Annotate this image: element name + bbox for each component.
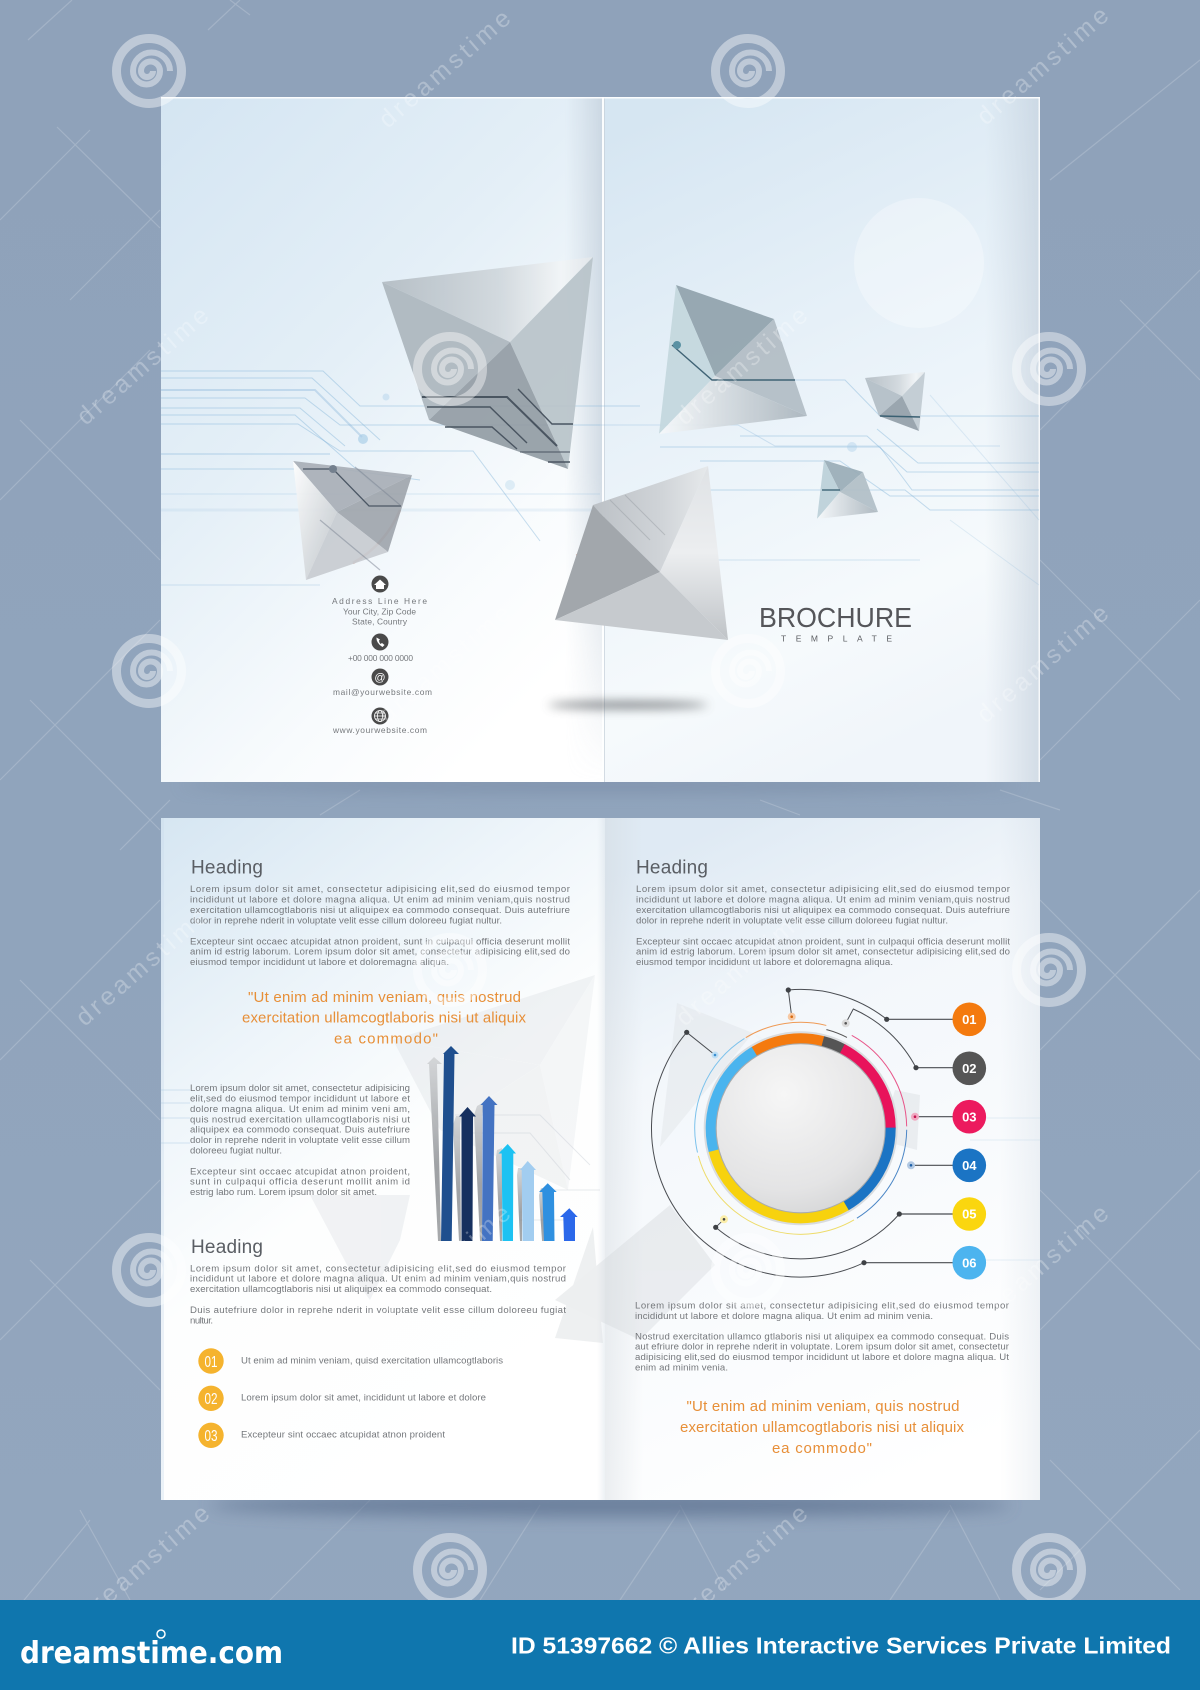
text block: left lower: [190, 1263, 567, 1326]
lens arc: [353, 510, 593, 617]
list item 02: [198, 1386, 486, 1411]
arrow 7: [560, 1208, 578, 1241]
text block: left column: [190, 1083, 410, 1198]
text block: left intro: dolor in reprehe nderit in voluptate velit esse cillum doloreeu fugiat nultur.: [190, 915, 502, 926]
text block: left intro: [190, 884, 571, 968]
text block: left column: Excepteur sint occaec atcupidat atnon proident,: [190, 1166, 410, 1177]
text block: left column: dolor in reprehe nderit in voluptate velit esse cillum: [190, 1135, 410, 1146]
list item 02: Lorem ipsum dolor sit amet, incididunt ut labore et dolore: [241, 1393, 486, 1404]
badge 06: 06: [962, 1255, 977, 1270]
pyramid: small lower right: [817, 460, 878, 519]
text block: left intro: Excepteur sint occaec atcupidat atnon proident, sunt in culpaqui officia deserunt mollit: [190, 936, 570, 947]
right cover page: [602, 97, 1040, 782]
text block: right intro: [636, 884, 1011, 968]
watermark text: dreamstime: [971, 1199, 1114, 1329]
badge 05: [952, 1197, 986, 1231]
callout: right quote: exercitation ullamcogtlaboris nisi ut aliquix: [680, 1419, 964, 1436]
title: BROCHURE TEMPLATE: TEMPLATE: [781, 634, 892, 644]
connector dots: [684, 987, 919, 1265]
text block: left intro: eiusmod tempor incididunt ut labore et doloremagna aliqua.: [190, 957, 449, 968]
right inside page: [605, 818, 1040, 1500]
badge 04: 04: [962, 1158, 977, 1173]
badge 05: 05: [962, 1207, 977, 1222]
contact: email: mail@yourwebsite.com: [333, 687, 432, 697]
watermark text: dreamstime: [373, 1199, 516, 1329]
arrow 3: [480, 1096, 498, 1241]
thin outer arcs: [655, 983, 946, 1274]
text block: right lower: Nostrud exercitation ullamco gtlaboris nisi ut aliquipex ea commodo consequat. Duis: [635, 1331, 1009, 1342]
watermark text: dreamstime: [670, 301, 813, 431]
text block: right intro: dolor in reprehe nderit in voluptate velit esse cillum doloreeu fugiat nultur.: [636, 915, 948, 926]
text block: left column: estrig labo rum. Lorem ipsum dolor sit amet.: [190, 1187, 377, 1198]
text block: right lower: adipisicing elit,sed do eiusmod tempor incididunt ut labore et dolore magna aliqua. Ut: [635, 1352, 1009, 1363]
callout: right quote: ea commodo": [772, 1440, 872, 1457]
arrow 1: [441, 1046, 459, 1241]
text block: right lower: enim ad minim venia.: [635, 1362, 728, 1373]
arrow 2: [459, 1107, 476, 1241]
panel: bottom brochure spread (inside): [161, 818, 1040, 1500]
contact: email: [333, 668, 432, 697]
text block: left column: quis nostrud exercitation ullamcogtlaboris nisi ut: [190, 1114, 410, 1125]
text block: right intro: Excepteur sint occaec atcupidat atnon proident, sunt in culpaqui officia deserunt mollit: [636, 936, 1010, 947]
text block: right intro: incididunt ut labore et dolore magna aliqua. Ut enim ad minim veniam,quis nostrud: [636, 894, 1010, 906]
text block: left intro: anim id estrig laborum. Lorem ipsum dolor sit amet, consectetur adipisicing elit,sed do: [190, 947, 570, 958]
heading: left page 2: Heading: [191, 1237, 263, 1258]
badge 04: [952, 1148, 986, 1182]
icon: globe: [372, 708, 388, 724]
pyramid: small upper right: [865, 372, 925, 431]
background shards: [310, 975, 920, 1343]
ground shadow: [548, 701, 708, 709]
list item 01: Ut enim ad minim veniam, quisd exercitation ullamcogtlaboris: [241, 1355, 503, 1366]
callout: right quote: [680, 1398, 964, 1457]
circuit nodes: [358, 394, 857, 490]
text block: right lower: [635, 1301, 1010, 1373]
badge 02: 02: [962, 1061, 977, 1076]
watermark text: dreamstime: [670, 1499, 813, 1629]
watermark text: dreamstime: [70, 902, 213, 1032]
text block: left column: aliquipex ea commodo consequat. Duis autefriure: [190, 1125, 410, 1136]
pyramid: large centre-left: [382, 257, 593, 469]
text block: right intro: anim id estrig laborum. Lorem ipsum dolor sit amet, consectetur adipisicing elit,sed do: [636, 947, 1010, 958]
text block: right lower: incididunt ut labore et dolore magna aliqua. Ut enim ad minim venia.: [635, 1311, 933, 1322]
text block: left column: sunt in culpaqui officia deserunt mollit anim id: [190, 1177, 410, 1188]
shadow under bottom spread: [210, 1494, 1010, 1516]
callout: left quote: [242, 989, 526, 1048]
text block: left intro: incididunt ut labore et dolore magna aliqua. Ut enim ad minim veniam,quis nostrud: [190, 894, 570, 906]
text block: left lower: Lorem ipsum dolor sit amet, consectetur adipisicing elit,sed do eiusmod tempor: [190, 1263, 567, 1274]
footer bar: [0, 1600, 1200, 1690]
watermark text: dreamstime: [971, 1, 1114, 131]
callout: left quote: exercitation ullamcogtlaboris nisi ut aliquix: [242, 1010, 526, 1026]
badge 03: [952, 1100, 986, 1133]
credit line: ID 51397662 © Allies Interactive Services Private Limited: [511, 1632, 1171, 1658]
text block: right intro: eiusmod tempor incididunt ut labore et doloremagna aliqua.: [636, 957, 893, 968]
logo: dreamstime.com: dreamstime.com: [20, 1636, 283, 1671]
watermark text: dreamstime: [72, 1499, 215, 1629]
text block: left column: doloreeu fugiat nultur.: [190, 1145, 282, 1156]
text block: right lower: aut efriure dolor in reprehe nderit in voluptate. Lorem ipsum dolor sit amet, consectetur: [635, 1342, 1010, 1353]
text block: left column: Lorem ipsum dolor sit amet, consectetur adipisicing: [190, 1083, 410, 1094]
callout: right quote: "Ut enim ad minim veniam, quis nostrud: [686, 1398, 960, 1415]
list item 01: [198, 1348, 503, 1374]
title: BROCHURE TEMPLATE: BROCHURE: [759, 602, 912, 633]
heading: right page: Heading: [636, 858, 708, 878]
contact: website: [332, 708, 427, 735]
callout: left quote: ea commodo": [334, 1030, 438, 1048]
watermark text: dreamstime: [971, 599, 1114, 729]
contact: address: [332, 576, 427, 626]
badge 01: 01: [962, 1012, 977, 1027]
list item 01: 01: [204, 1354, 218, 1371]
contact: phone: +00 000 000 0000: [348, 653, 413, 663]
text block: left lower: Duis autefriure dolor in reprehe nderit in voluptate velit esse cillum doloreeu fugiat: [190, 1305, 566, 1316]
decorative circle: [854, 198, 984, 328]
icon: home: [372, 576, 388, 592]
watermark text: dreamstime: [373, 599, 516, 729]
list item 03: [198, 1423, 445, 1448]
chart: descending blue arrows: [427, 1046, 578, 1241]
contact: phone: [348, 634, 413, 663]
text block: right intro: Lorem ipsum dolor sit amet, consectetur adipisicing elit,sed do eiusmod tempor: [636, 884, 1011, 895]
list item 02: 02: [204, 1391, 218, 1408]
arrow shadows: [427, 1057, 544, 1241]
list item 03: 03: [204, 1428, 218, 1445]
contact: address: Address Line Here: [332, 596, 427, 606]
badge 01: [952, 1002, 986, 1036]
shadow under top spread: [180, 779, 1020, 791]
text block: left lower: exercitation ullamcogtlaboris nisi ut aliquipex ea commodo consequat.: [190, 1284, 492, 1295]
contact: address: Your City, Zip Code: [343, 606, 416, 616]
badge 03: 03: [962, 1109, 977, 1124]
text block: left intro: Lorem ipsum dolor sit amet, consectetur adipisicing elit,sed do eiusmod tempor: [190, 884, 571, 895]
icon: at sign: @: [374, 672, 386, 684]
chart: circular ring infographic: [651, 983, 986, 1279]
text block: left column: dolore magna aliqua. Ut enim ad minim veni am,: [190, 1104, 410, 1115]
left cover page: [161, 97, 602, 782]
left inside page: [161, 818, 605, 1500]
watermark spirals: [116, 38, 1082, 1602]
watermark text: dreamstime: [71, 301, 214, 431]
text block: right intro: exercitation ullamcogtlaboris nisi ut aliquipex ea commodo consequat. Duis autefriure: [636, 905, 1010, 916]
arrow 5: [520, 1161, 536, 1241]
text block: left column: elit,sed do eiusmod tempor incididunt ut labore et: [190, 1094, 410, 1105]
badge 06: [952, 1246, 986, 1279]
arrow 6: [539, 1183, 557, 1241]
text block: left lower: incididunt ut labore et dolore magna aliqua. Ut enim ad minim veniam,quis nostrud: [190, 1274, 566, 1285]
centre disc: [704, 1031, 898, 1225]
coloured halo dots: [712, 1013, 919, 1223]
pyramid: small lower-left: [293, 461, 412, 580]
pyramid: upper centre-right: [659, 285, 807, 434]
icon: phone: [372, 634, 388, 650]
connector lines: [651, 989, 965, 1277]
contact: address: State, Country: [352, 616, 408, 626]
text block: left lower: nultur.: [190, 1315, 213, 1326]
circuit lines: [161, 371, 1039, 585]
list item 03: Excepteur sint occaec atcupidat atnon proident: [241, 1430, 445, 1441]
ring segments: [677, 1005, 924, 1252]
panel: top brochure spread (cover): [161, 97, 1040, 782]
contact: website: www.yourwebsite.com: [332, 725, 427, 735]
watermark text: dreamstime: [670, 902, 813, 1032]
text block: left intro: exercitation ullamcogtlaboris nisi ut aliquipex ea commodo consequat. Duis autefriure: [190, 905, 570, 916]
watermark text: dreamstime: [373, 4, 516, 134]
arrow 4: [498, 1144, 516, 1241]
text block: right lower: Lorem ipsum dolor sit amet, consectetur adipisicing elit,sed do eiusmod tempor: [635, 1301, 1010, 1312]
badge 02: [952, 1052, 986, 1085]
heading: left page 1: Heading: [191, 858, 263, 878]
pyramid: bottom centre: [555, 466, 728, 640]
callout: left quote: "Ut enim ad minim veniam, quis nostrud: [248, 989, 521, 1006]
